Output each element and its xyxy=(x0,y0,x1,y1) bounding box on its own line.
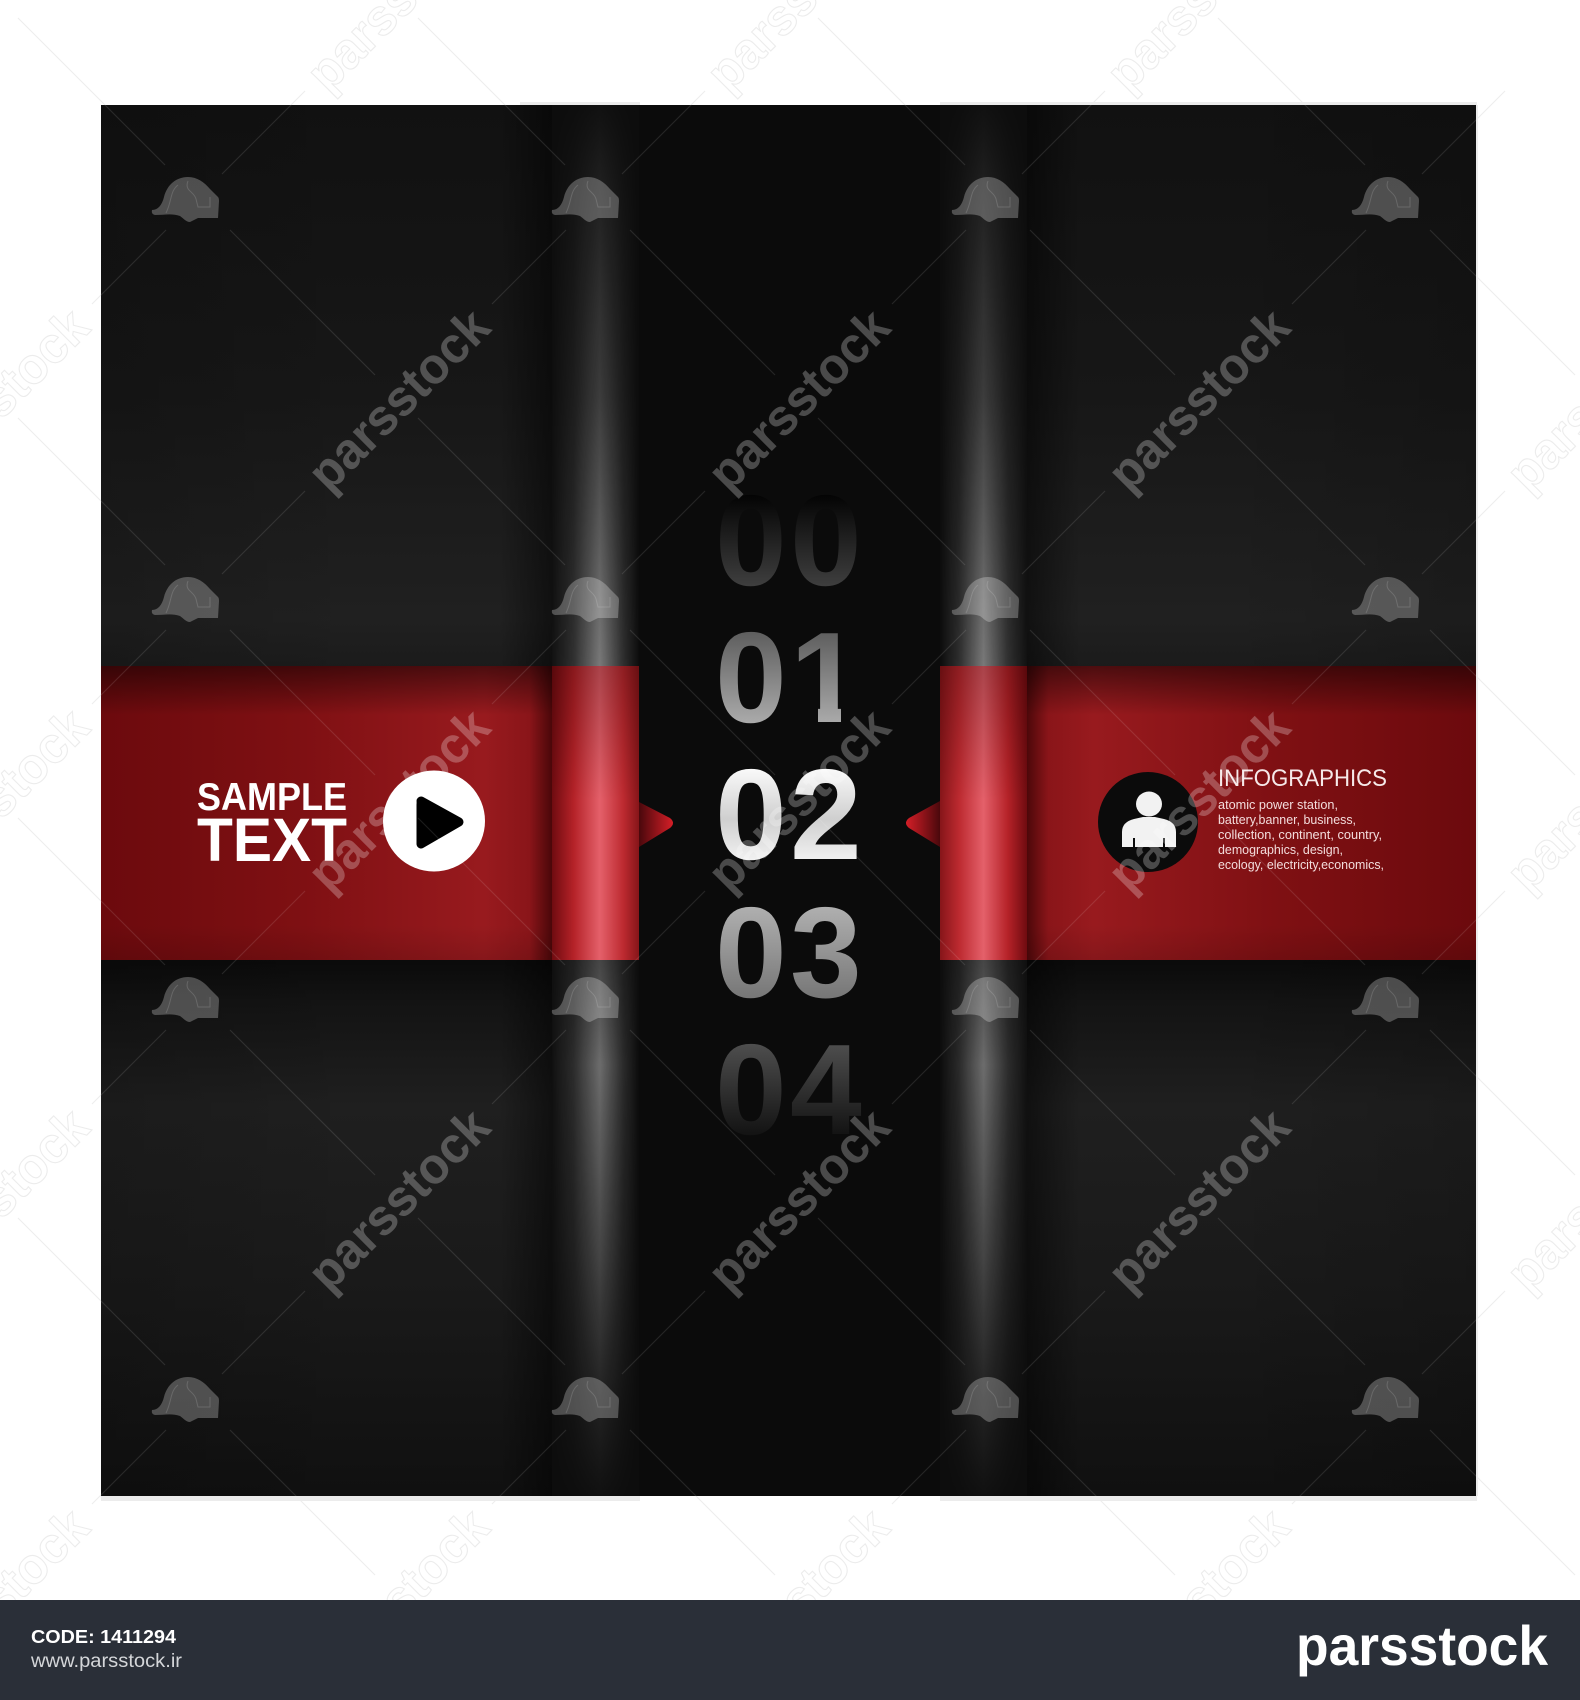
icon: person badge xyxy=(1098,772,1198,872)
heading: infographics: INFOGRAPHICS xyxy=(1218,765,1387,792)
watermark layer over panel: parsstock xyxy=(1096,697,1301,902)
footer bar xyxy=(0,1600,1580,1700)
watermark layer over panel: parsstock xyxy=(1096,297,1301,502)
grey vertical roll: left xyxy=(552,105,639,1496)
number 00: 00 xyxy=(715,469,862,613)
panel: right red band xyxy=(940,666,1476,960)
dark panel: centre column xyxy=(639,105,940,1496)
heading: sample text xyxy=(197,776,347,874)
text block: keywords: collection, continent, country, xyxy=(1218,827,1382,842)
text block: keywords: atomic power station, xyxy=(1218,797,1338,812)
icon: play button xyxy=(383,770,485,872)
heading: sample text: TEXT xyxy=(197,806,347,874)
text block: keywords xyxy=(1218,797,1384,872)
panel: left red band xyxy=(101,666,639,960)
numbers column xyxy=(720,519,861,1134)
number 02: 02 xyxy=(715,743,862,887)
arrow: right pointer xyxy=(906,801,940,847)
watermark layer over panel: parsstock xyxy=(1096,1097,1301,1302)
text block: keywords: battery,banner, business, xyxy=(1218,812,1356,827)
footer code: CODE: 1411294 xyxy=(31,1627,176,1647)
text block: keywords: ecology, electricity,economics, xyxy=(1218,857,1384,872)
watermark layer over panel: parsstock xyxy=(696,1097,901,1302)
watermark layer over panel: parsstock xyxy=(696,297,901,502)
text block: keywords: demographics, design, xyxy=(1218,842,1343,857)
dark panel: right xyxy=(1026,105,1476,1496)
number 04: 04 xyxy=(715,1018,862,1162)
arrow: left pointer xyxy=(639,802,673,847)
footer logo: parsstock xyxy=(1296,1614,1549,1677)
footer url: www.parsstock.ir xyxy=(30,1651,183,1672)
watermark layer over panel: parsstock xyxy=(296,297,501,502)
faint watermark layer on white margin: parsstock xyxy=(695,1497,900,1700)
panel soft edge shadow xyxy=(101,102,1478,1501)
faint watermark layer on white margin: parsstock xyxy=(1095,1497,1300,1700)
grey vertical roll: right xyxy=(940,105,1027,1496)
watermark layer over panel: parsstock xyxy=(296,1097,501,1302)
watermark layer over panel: parsstock xyxy=(296,697,501,902)
number 01: 01 xyxy=(715,606,862,750)
number 03: 03 xyxy=(715,881,862,1025)
heading: sample text: SAMPLE xyxy=(197,776,347,819)
dark panel: left xyxy=(101,105,552,1496)
watermark layer over panel xyxy=(101,105,1476,1496)
faint watermark layer on white margin: parsstock xyxy=(295,1497,500,1700)
watermark layer over panel: parsstock xyxy=(696,697,901,902)
